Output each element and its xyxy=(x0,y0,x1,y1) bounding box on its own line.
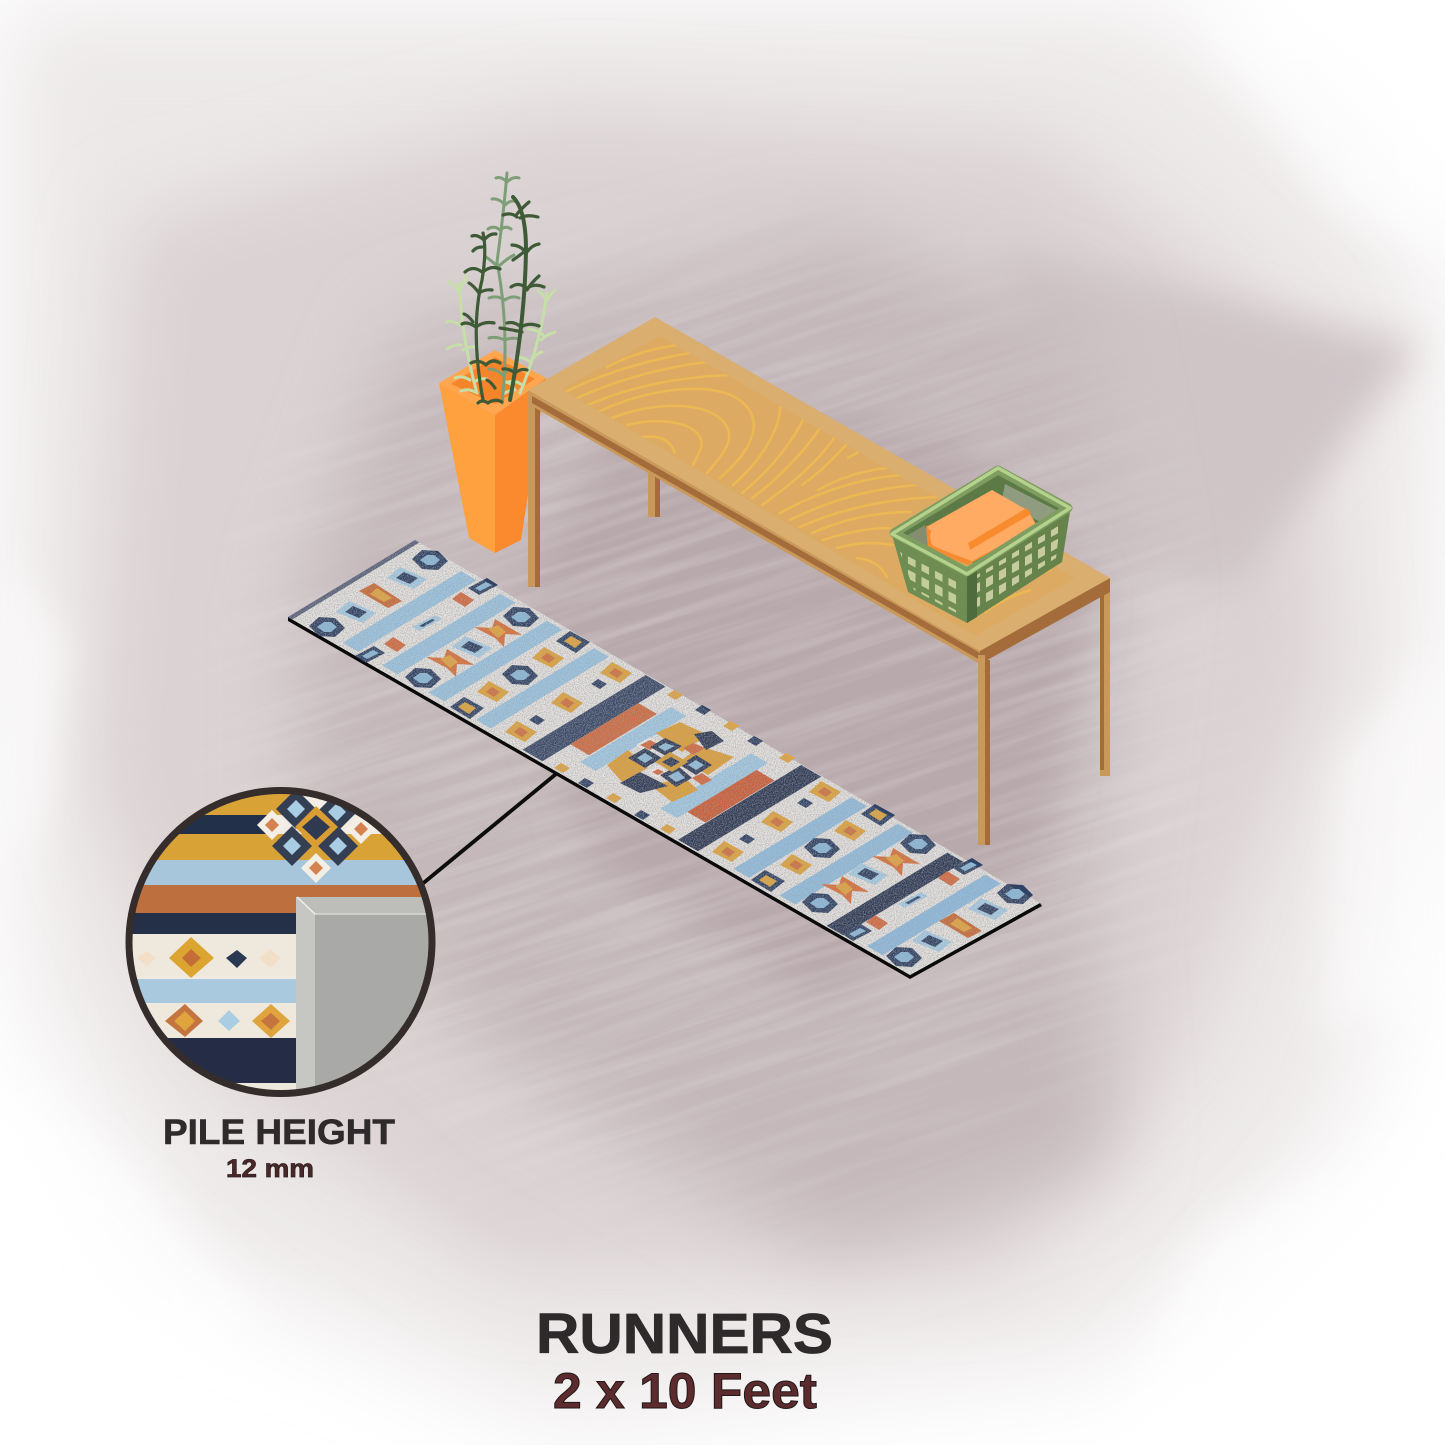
table front leg xyxy=(978,655,990,845)
bench table xyxy=(528,317,1110,845)
rug stripes xyxy=(288,540,1005,958)
laundry basket xyxy=(892,468,1070,623)
inset medallion xyxy=(257,794,371,883)
inset small diamonds xyxy=(137,937,290,1038)
table back leg xyxy=(648,470,660,517)
label: 12 mm: 12 mm xyxy=(226,1155,314,1183)
rug pile texture xyxy=(288,540,1042,978)
basket left face xyxy=(892,535,967,623)
inset circle: pile detail xyxy=(129,778,432,1094)
basket back inner xyxy=(895,470,1068,575)
rug center medallion xyxy=(607,722,734,802)
wood grain xyxy=(565,345,1050,612)
rug motifs xyxy=(309,550,1033,967)
plant pot xyxy=(439,350,546,553)
towels xyxy=(926,490,1037,570)
table top xyxy=(528,317,1110,651)
basket right face xyxy=(967,512,1070,623)
leader line from runner to inset xyxy=(421,774,556,885)
table front apron xyxy=(528,390,980,664)
basket rim xyxy=(894,470,1068,572)
subtitle: size: 2 x 10 Feet xyxy=(553,1363,817,1419)
title: runners: RUNNERS xyxy=(536,1302,833,1366)
plant stems xyxy=(447,173,555,403)
label: pile height: PILE HEIGHT xyxy=(163,1113,395,1152)
table right leg xyxy=(1100,585,1110,776)
rug back corner xyxy=(296,897,426,914)
table left leg xyxy=(528,395,540,587)
runner rug xyxy=(288,540,1042,979)
